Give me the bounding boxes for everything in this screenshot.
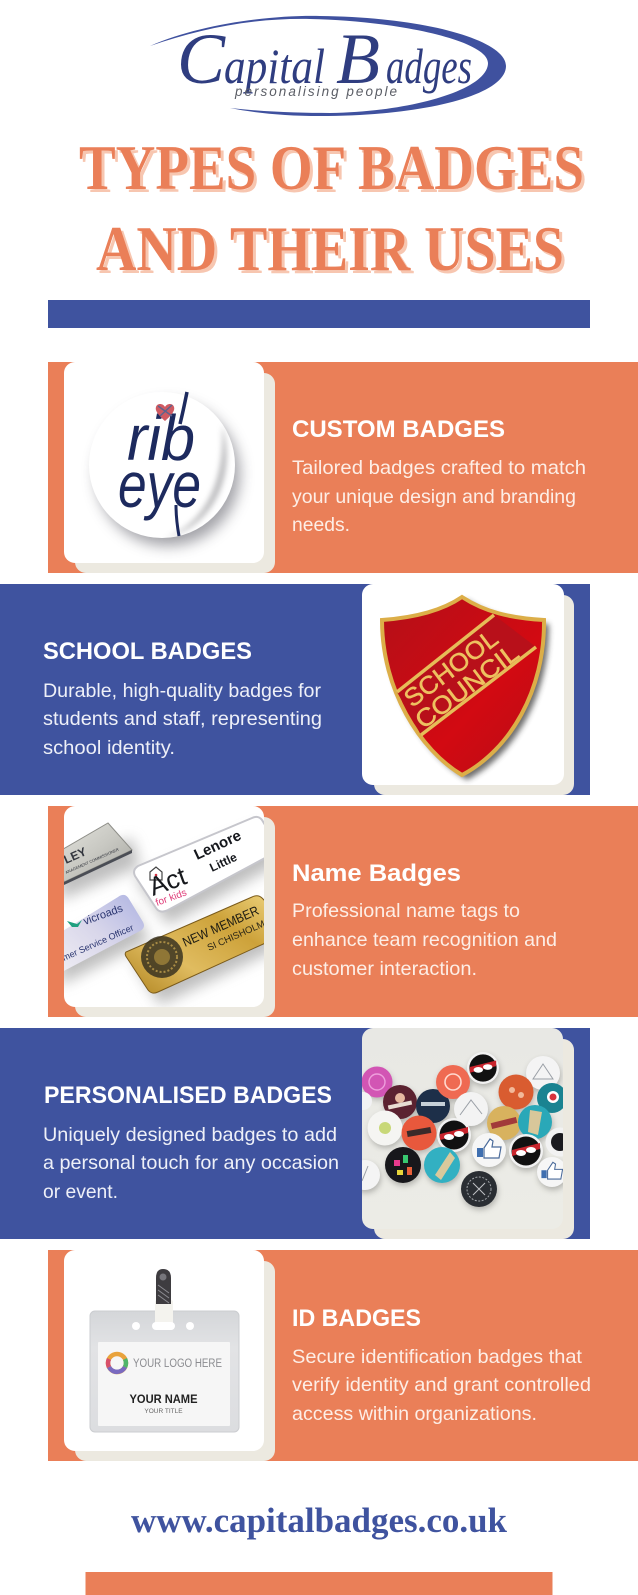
silver name tag: ANAGEMENT COMMISSIONER <box>64 847 120 875</box>
lavender vicroads name tag <box>64 894 144 971</box>
description: a personal touch for any occasion <box>43 1152 339 1174</box>
description <box>292 1346 591 1425</box>
logo swoosh ellipse <box>150 16 506 116</box>
image card with name tag photo <box>64 806 264 1007</box>
title line 2: AND THEIR USES <box>96 213 564 284</box>
image backing card <box>75 1261 275 1461</box>
panel background <box>0 1028 590 1239</box>
icon: school council shield <box>382 597 549 780</box>
description <box>292 457 586 536</box>
gold new member name tag: SI CHISHOLM <box>206 919 267 954</box>
image card <box>64 1250 264 1451</box>
description: your unique design and branding <box>292 486 576 508</box>
description: Professional name tags to <box>292 900 520 922</box>
description: Tailored badges crafted to match <box>292 457 586 479</box>
description: access within organizations. <box>292 1403 537 1425</box>
logo wordmark: C <box>177 19 226 99</box>
description: verify identity and grant controlled <box>292 1374 591 1396</box>
description: Secure identification badges that <box>292 1346 583 1368</box>
silver name tag <box>58 823 132 885</box>
logo wordmark: B <box>336 19 380 99</box>
description: or event. <box>43 1181 118 1203</box>
description: students and staff, representing <box>43 708 322 730</box>
icon: school council shield: COUNCIL <box>410 639 524 735</box>
logo: Capital Badges <box>150 16 506 116</box>
panel background <box>48 362 638 573</box>
description <box>43 680 322 759</box>
logo tagline: personalising people <box>234 84 397 99</box>
panel: personalised badges <box>0 1028 590 1239</box>
website url: www.capitalbadges.co.uk <box>131 1501 508 1540</box>
lavender vicroads name tag: mer Service Officer <box>61 922 135 963</box>
title <box>79 132 587 287</box>
image card with button badges photo <box>362 1028 563 1229</box>
description <box>292 900 557 980</box>
icon: rib eye button badge <box>89 392 240 546</box>
description <box>43 1124 339 1203</box>
icon: id badge holder: YOUR NAME <box>130 1392 198 1406</box>
description: Durable, high-quality badges for <box>43 680 322 702</box>
icon: rib eye button badge: eye <box>118 449 201 521</box>
heading: CUSTOM BADGES <box>292 416 505 443</box>
panel: name badges <box>48 806 638 1017</box>
icon: rib eye button badge: rib <box>127 402 195 474</box>
icon: id badge holder: YOUR LOGO HERE <box>133 1358 222 1370</box>
gold new member name tag <box>125 896 272 993</box>
icon: id badge holder <box>90 1269 239 1432</box>
logo wordmark: adges <box>386 38 472 94</box>
icon: school council shield: SCHOOL <box>399 624 504 713</box>
logo wordmark: apital <box>224 38 325 94</box>
title shadow line 2: AND THEIR USES <box>99 216 567 287</box>
description: needs. <box>292 514 350 536</box>
panel: custom badges <box>48 362 638 573</box>
white Act for kids name tag <box>134 817 280 912</box>
description: customer interaction. <box>292 958 477 980</box>
panel: id badges <box>48 1250 638 1461</box>
gold new member name tag: NEW MEMBER <box>180 903 261 950</box>
description: Uniquely designed badges to add <box>43 1124 337 1146</box>
panel background <box>48 806 638 1017</box>
heading: ID BADGES <box>292 1305 421 1332</box>
image backing card <box>75 817 275 1017</box>
panel background <box>48 1250 638 1461</box>
description: school identity. <box>43 737 175 759</box>
image card <box>362 584 564 785</box>
white Act for kids name tag: Lenore <box>192 827 244 864</box>
panel background <box>0 584 590 795</box>
image backing card <box>374 595 574 795</box>
footer bar <box>86 1572 552 1595</box>
divider bar <box>48 300 590 328</box>
heading: PERSONALISED BADGES <box>44 1082 332 1109</box>
white Act for kids name tag: Act <box>145 860 191 902</box>
image backing card <box>75 373 275 573</box>
silver name tag: LEY <box>62 844 89 867</box>
icon: id badge holder: YOUR TITLE <box>144 1408 183 1415</box>
heading: Name Badges <box>292 860 461 887</box>
image card <box>64 362 264 563</box>
description: enhance team recognition and <box>292 929 557 951</box>
panel: school badges <box>0 584 590 795</box>
image backing card <box>374 1039 574 1239</box>
lavender vicroads name tag: vicroads <box>82 902 125 928</box>
white Act for kids name tag: Little <box>207 850 240 875</box>
button badges <box>362 1052 563 1207</box>
heading: SCHOOL BADGES <box>43 638 252 665</box>
white Act for kids name tag: for kids <box>154 887 188 909</box>
